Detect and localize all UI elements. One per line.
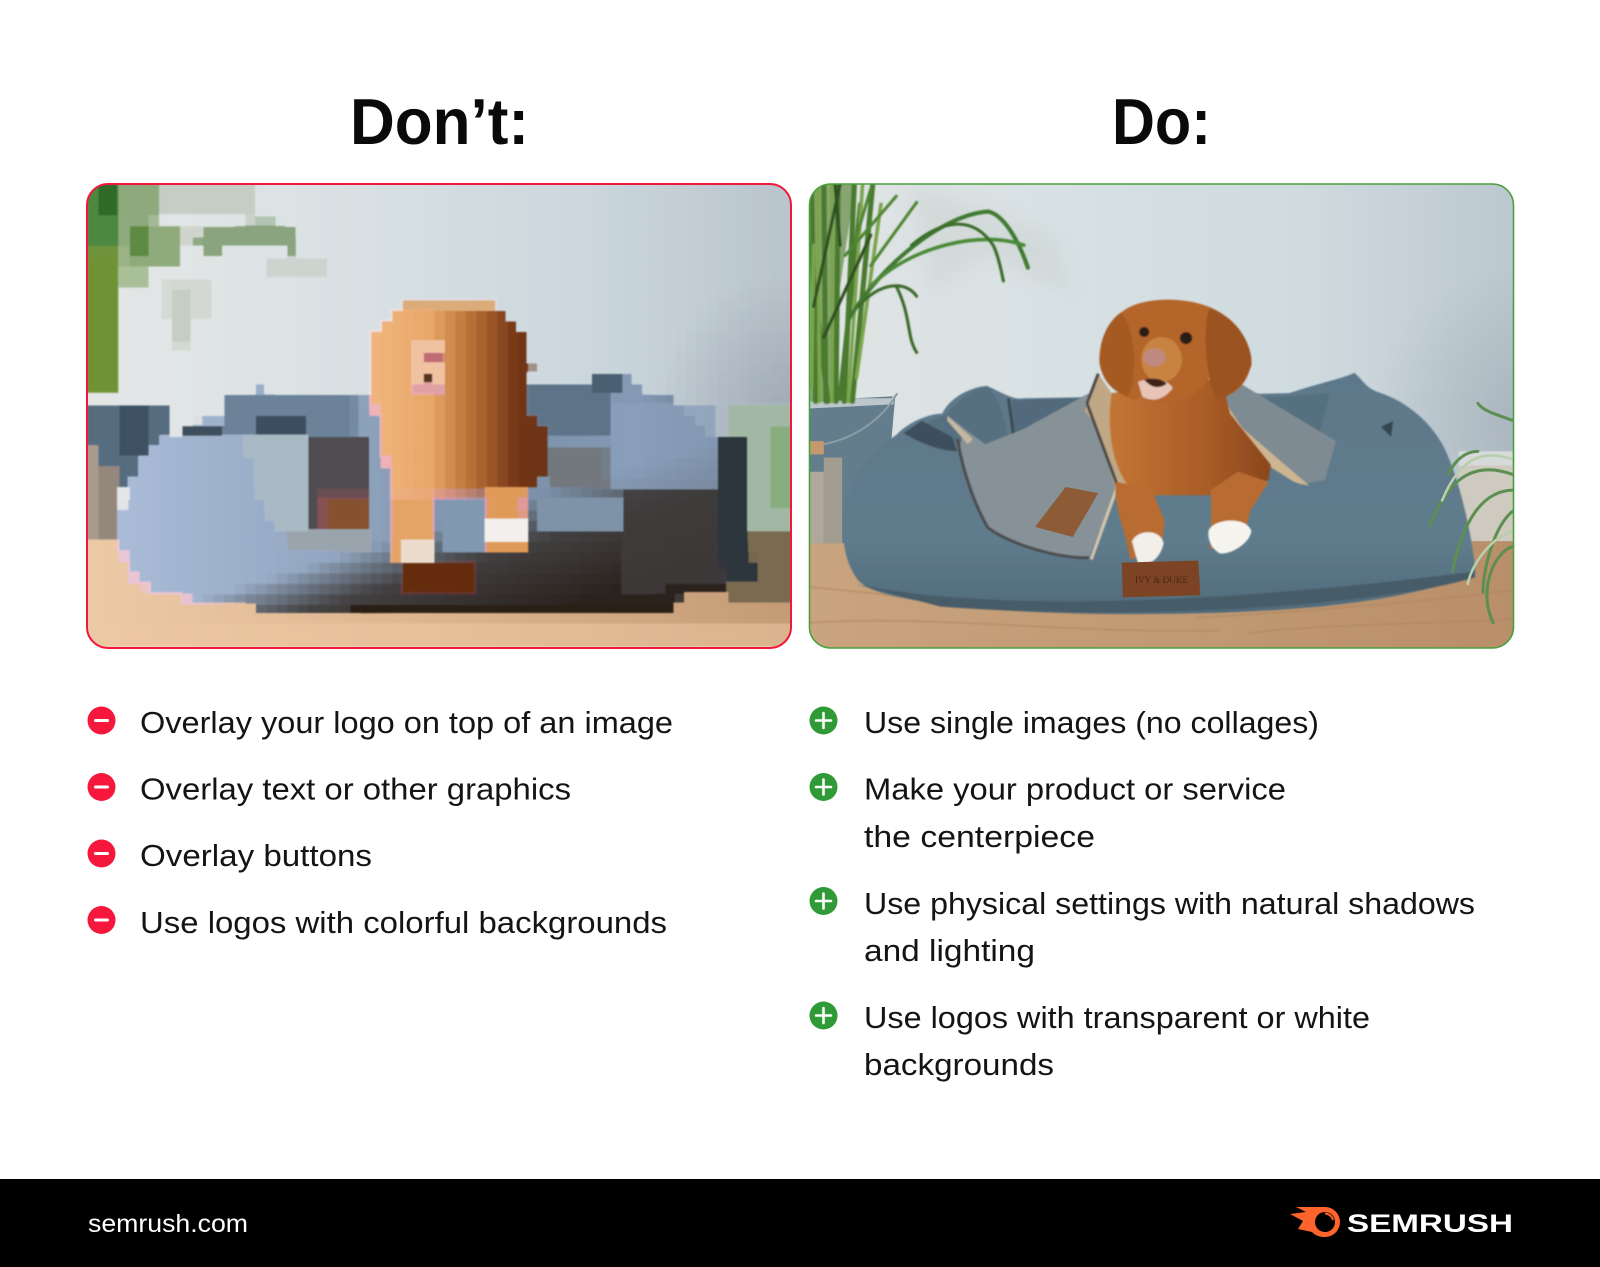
item: overlay text: Overlay text or other graphics bbox=[140, 772, 571, 806]
item: transparent logos: Use logos with transparent or white bbox=[864, 1000, 1370, 1035]
item: product centerpiece bbox=[810, 772, 1286, 854]
front leather label bbox=[1122, 561, 1200, 597]
list: dos bbox=[810, 705, 1475, 1082]
item: physical settings: Use physical settings with natural shadows bbox=[864, 886, 1475, 921]
bucket bbox=[810, 393, 897, 543]
list: don'ts bbox=[88, 705, 673, 940]
item: colorful logos: Use logos with colorful backgrounds bbox=[140, 905, 667, 940]
icon: flame bbox=[1290, 1207, 1340, 1237]
item: product centerpiece: the centerpiece bbox=[864, 819, 1095, 854]
front leather label: IVY & DUKE bbox=[1135, 575, 1189, 585]
item: physical settings: and lighting bbox=[864, 933, 1035, 968]
item: physical settings bbox=[810, 886, 1475, 968]
dog bbox=[1099, 300, 1271, 565]
right plant bbox=[1430, 403, 1514, 623]
dog bed bbox=[843, 373, 1476, 614]
wooden floor bbox=[810, 541, 1514, 653]
item: overlay buttons: Overlay buttons bbox=[140, 838, 372, 873]
dog face bbox=[1138, 327, 1192, 400]
panel: sharp dog photo (do) bbox=[810, 184, 1524, 653]
wall bbox=[810, 184, 1513, 488]
semrush logo bbox=[1290, 1207, 1513, 1238]
heading: Do: Do: bbox=[1112, 85, 1211, 158]
item: product centerpiece: Make your product or service bbox=[864, 772, 1286, 806]
heading: Don't: Don’t: bbox=[350, 85, 529, 158]
plant bbox=[810, 184, 1028, 401]
plant shadow bbox=[921, 198, 1058, 278]
footer url: semrush.com bbox=[88, 1210, 248, 1238]
item: transparent logos: backgrounds bbox=[864, 1047, 1054, 1082]
item: single images: Use single images (no collages) bbox=[864, 705, 1319, 740]
blanket leather patch bbox=[1035, 487, 1098, 537]
item: transparent logos bbox=[810, 1000, 1370, 1082]
blanket bbox=[947, 374, 1336, 560]
item: overlay logo: Overlay your logo on top of an image bbox=[140, 705, 673, 740]
wordmark: SEMRUSH bbox=[1347, 1210, 1513, 1238]
panel: pixelated dog photo (don't) bbox=[82, 179, 801, 653]
footer bar bbox=[0, 1179, 1600, 1267]
baseboard bbox=[1458, 451, 1520, 466]
